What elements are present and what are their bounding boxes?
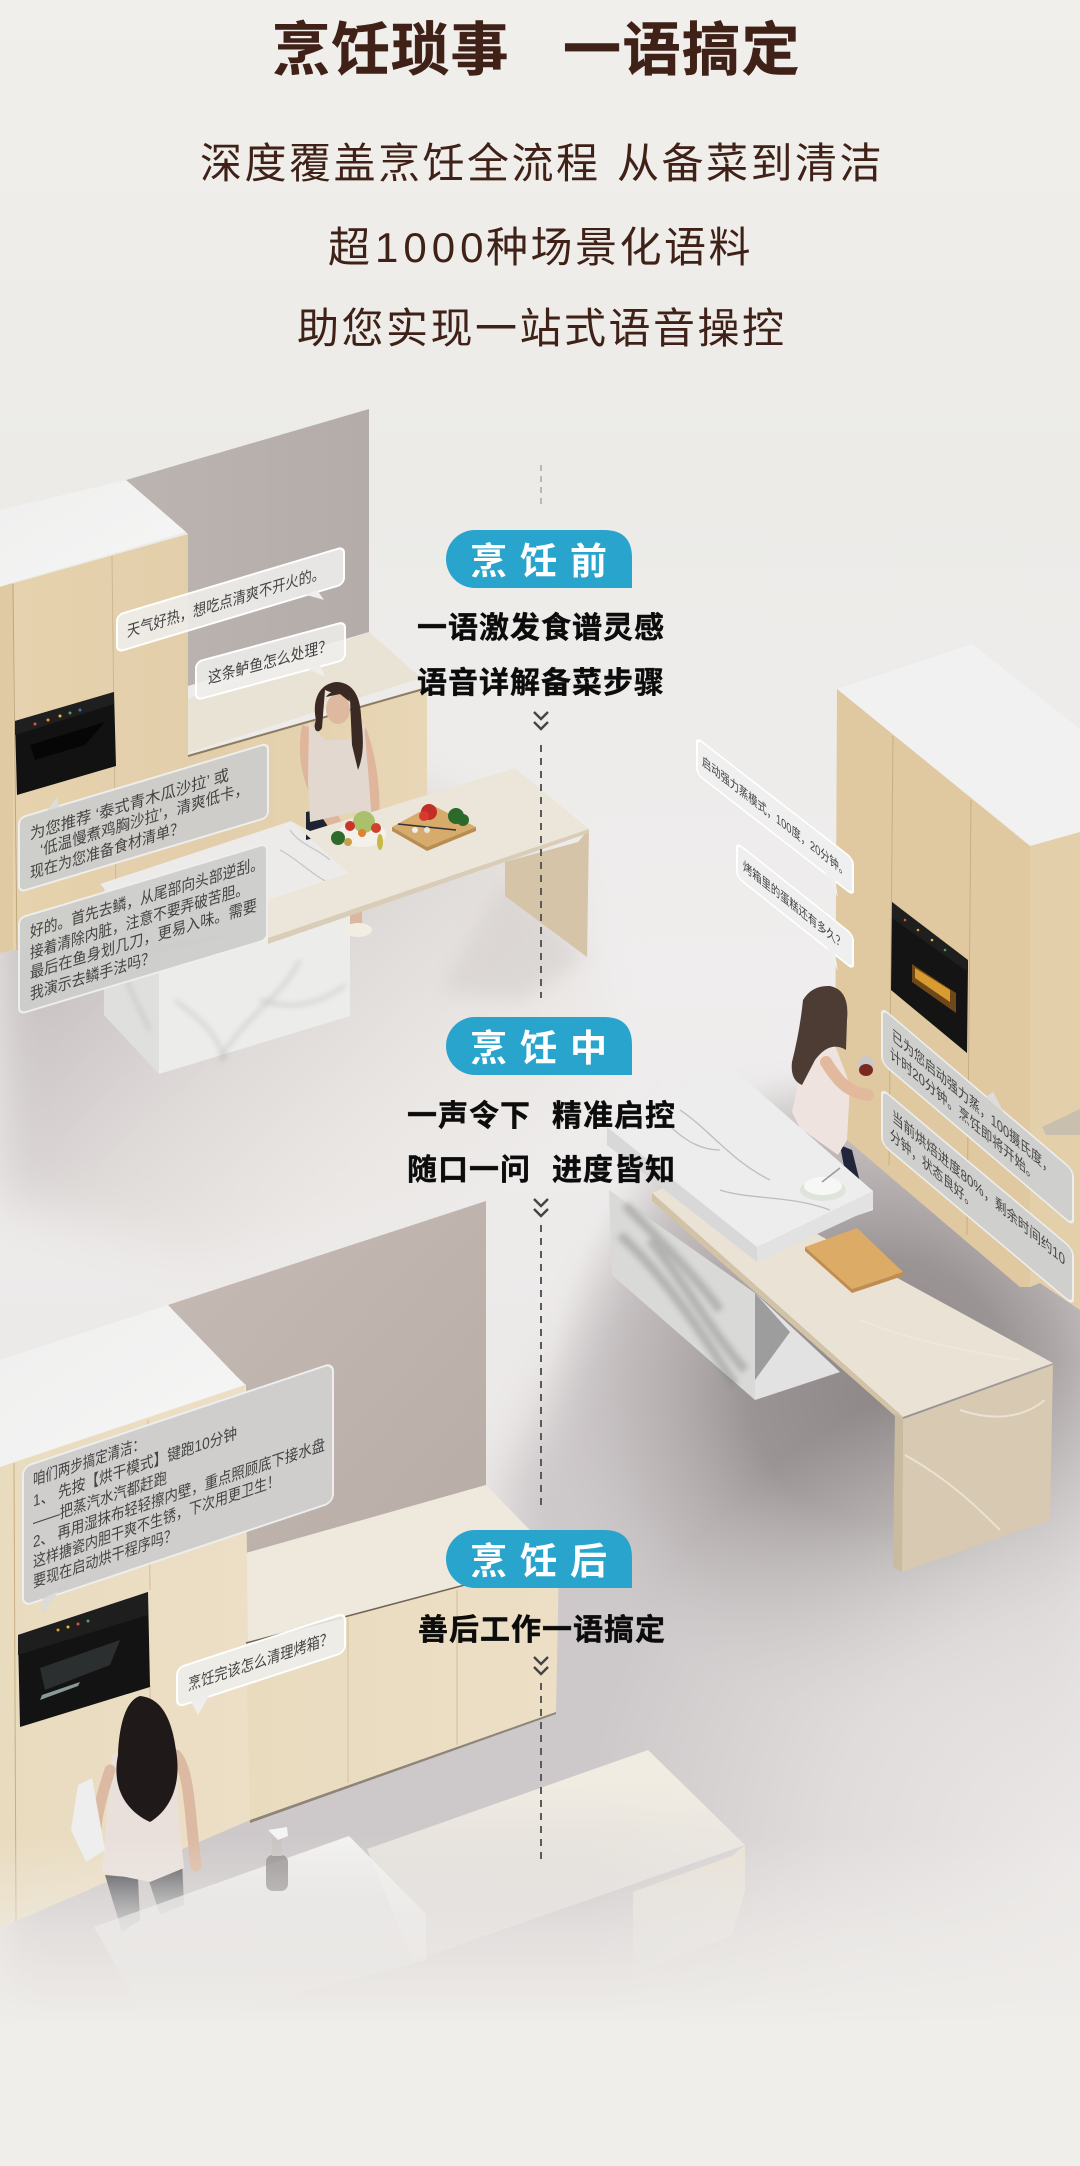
cabinet right face [1030, 832, 1080, 1310]
section heading: after cooking: 善后工作一语搞定 [418, 1614, 666, 1647]
section heading: before cooking: 一语激发食谱灵感 [417, 612, 665, 645]
subtitle: 深度覆盖烹饪全流程 [200, 140, 601, 187]
speech bubble: fish instructions [19, 844, 267, 1014]
countertop back [188, 632, 421, 753]
chevrons: after cooking [534, 1657, 548, 1674]
speech bubble: cleaning steps: 1、 先按【烘干模式】键跑10分钟 [33, 1425, 237, 1511]
cutting board [805, 1228, 903, 1293]
oven [18, 1592, 150, 1727]
speech bubble: cleaning steps [23, 1363, 333, 1621]
woman preparing food [300, 682, 380, 838]
speech bubble: salad recommendation: ‘低温慢煮鸡胸沙拉’，清爽低卡， [40, 779, 249, 860]
speech bubble: craving something cool: 天气好热，想吃点清爽不开火的。 [127, 564, 325, 641]
subtitle: 超 [328, 224, 373, 271]
section heading: during cooking: 一声令下 [407, 1100, 531, 1133]
subtitle: 助您实现一站式语音操控 [297, 305, 787, 352]
cream table [367, 1750, 745, 1975]
marble slab [94, 1836, 426, 2030]
cabinet top [0, 480, 186, 586]
woman with wine glass [792, 986, 874, 1182]
spray bottle [266, 1827, 288, 1891]
section heading: during cooking: 进度皆知 [552, 1154, 676, 1187]
speech bubble: fish instructions: 接着清除内脏，注意不要弄破苦胆。 [30, 878, 249, 963]
oven [891, 902, 968, 1053]
countertop back [246, 1485, 559, 1643]
speech bubble: fish question [196, 622, 345, 712]
speech bubble: cake remaining time: 烤箱里的蛋糕还有多久？ [743, 858, 845, 954]
speech bubble: craving something cool [117, 547, 344, 662]
floor: first kitchen [0, 790, 610, 1260]
table leg [505, 829, 589, 957]
title: 烹饪琐事 [272, 18, 510, 83]
table top [268, 768, 589, 938]
bowl of vegetables [331, 811, 386, 850]
section heading: during cooking [407, 1100, 676, 1187]
speech bubble: cake remaining time [737, 843, 853, 983]
speech bubble: fish question: 这条鲈鱼怎么处理？ [208, 637, 332, 688]
section heading: before cooking [417, 612, 665, 700]
speech bubble: cleaning steps: 2、 再用湿抹布轻轻擦内壁，重点照顾底下接水盘 [33, 1435, 325, 1552]
section pill: during cooking [446, 1017, 632, 1075]
section pill: after cooking [446, 1530, 632, 1588]
speech bubble: cleaning steps: 要现在启动烘干程序吗？ [33, 1526, 177, 1592]
cream table [652, 1170, 1053, 1572]
floor shadow: first table [440, 880, 587, 1000]
marble slab [607, 1062, 873, 1262]
lower cabinet [246, 1560, 559, 1820]
speech bubble: how to clean oven [177, 1613, 345, 1722]
subtitle: 从备菜到清洁 [617, 140, 884, 187]
speech bubble: fish instructions: 最后在鱼身划几刀，更易入味。需要 [30, 897, 257, 983]
speech bubble: baking progress: 分钟，状态良好。 [890, 1125, 975, 1214]
speech bubble: start steam mode [697, 738, 853, 909]
section pill: before cooking [446, 530, 632, 588]
panel: third kitchen after cooking [0, 1201, 745, 2030]
section pill: before cooking: 烹饪前 [470, 541, 620, 582]
speech bubble: cleaning steps: 咱们两步搞定清洁： [33, 1435, 145, 1490]
section pill: during cooking: 烹饪中 [470, 1028, 620, 1069]
cabinet top [0, 1305, 245, 1467]
section heading: before cooking: 语音详解备菜步骤 [417, 667, 665, 700]
speech bubble: how to clean oven: 烹饪完该怎么清理烤箱？ [188, 1628, 333, 1694]
dashed timeline [540, 465, 542, 1860]
cabinet top [837, 644, 1080, 846]
chevrons: before cooking [534, 712, 548, 729]
speech bubble: salad recommendation: 现在为您准备食材清单？ [30, 819, 184, 883]
cutting board with vegetables [392, 804, 476, 851]
speech bubble: salad recommendation [19, 733, 268, 892]
speech bubble: fish instructions: 好的。首先去鳞，从尾部向头部逆刮。 [30, 854, 264, 942]
subtitle: 种场景化语料 [486, 224, 753, 271]
section heading: during cooking: 精准启控 [552, 1100, 676, 1133]
back wall [126, 409, 369, 686]
woman with towel [71, 1696, 196, 1932]
oven [15, 692, 116, 795]
panel: second kitchen during cooking [607, 644, 1080, 1572]
tall cabinet [0, 1385, 250, 1928]
marble island base [609, 1190, 840, 1400]
tall cabinet [0, 534, 427, 953]
title: 一语搞定 [563, 18, 801, 83]
subtitle [200, 140, 884, 352]
section pill: after cooking: 烹饪后 [470, 1541, 620, 1582]
marble island [100, 821, 350, 1074]
speech bubble: start steam mode: 启动强力蒸模式，100度，20分钟。 [702, 753, 848, 882]
speech bubble: cleaning steps: ——把蒸汽水汽都赶跑 [33, 1469, 167, 1532]
section heading: during cooking: 随口一问 [407, 1154, 531, 1187]
speech bubble: fish instructions: 我演示去鳞手法吗？ [30, 949, 155, 1004]
plate and spoon [800, 1168, 846, 1201]
subtitle: 1000 [375, 224, 488, 271]
floor: second and third kitchen [0, 1060, 1080, 2166]
speech bubble: cleaning steps: 这样搪瓷内胆干爽不生锈，下次用更卫生！ [33, 1471, 280, 1572]
woman legs and shoe [306, 808, 372, 937]
chevrons: during cooking [534, 1199, 548, 1216]
back wall [168, 1201, 486, 1553]
panel: first kitchen before cooking [0, 409, 589, 1074]
bottom fade [0, 1835, 1080, 2030]
speech bubble: salad recommendation: 为您推荐 ‘泰式青木瓜沙拉’ 或 [30, 766, 229, 844]
cabinet left face [835, 689, 1030, 1287]
